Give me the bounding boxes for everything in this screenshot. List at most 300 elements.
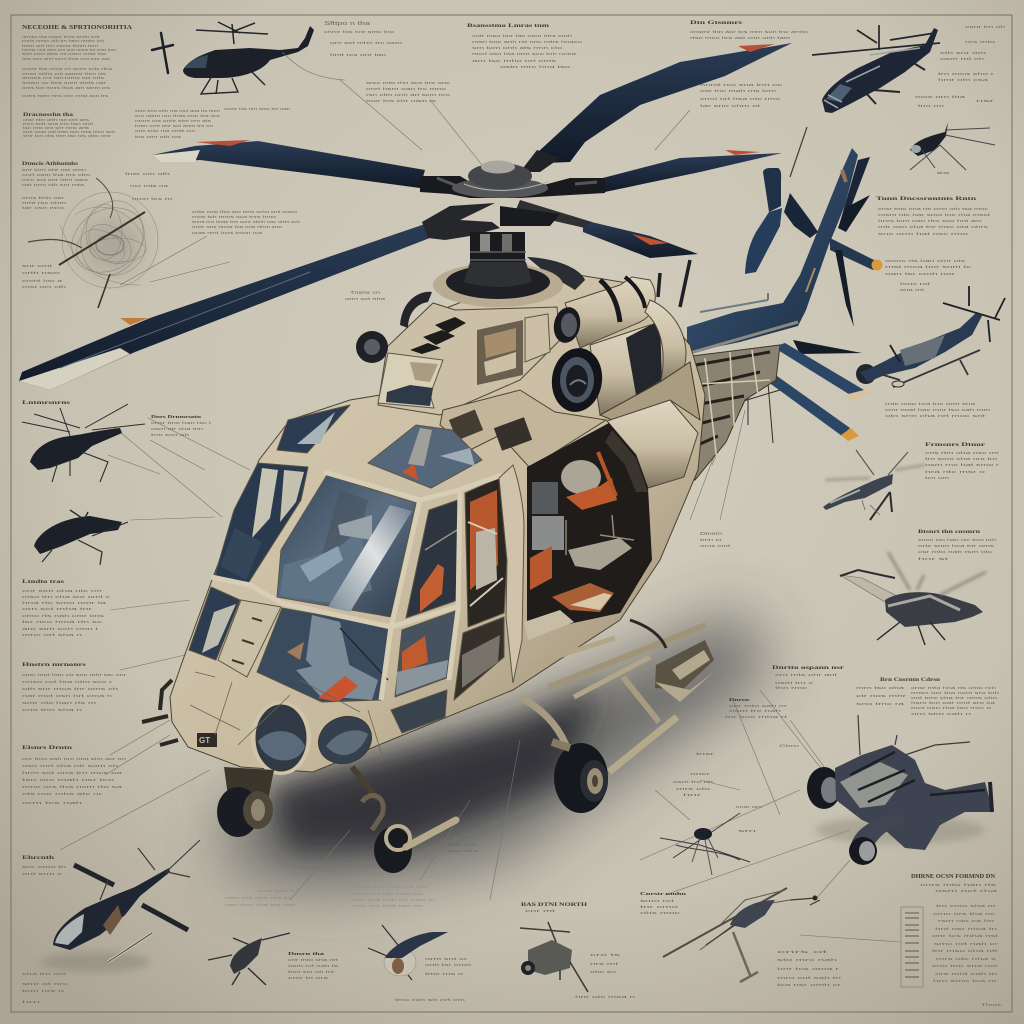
text block: columns: hsm tcn oar nmt sro ca [911, 701, 995, 705]
text block: bottom center: orm snt cr [425, 957, 469, 961]
text block: tail: hmc rot [900, 282, 930, 286]
text block: side note: osm trc nah [729, 709, 781, 713]
blade: lower right short [583, 220, 698, 258]
text block: bottom right: tnr mso cha ntr [932, 949, 1000, 953]
text block: cockpit note: osm ntr cha mn [151, 427, 203, 431]
text block: transmission: mtr osn cha tnr msc ota nhrs [878, 225, 988, 229]
text block: bottom center: cnh tsr omn [425, 963, 471, 967]
window: chin round right [311, 709, 379, 771]
text block: small gear notes: hnr [683, 793, 704, 797]
text block: small gear notes: Tnsmr cn [350, 290, 381, 295]
top left text column: anmrs cnr tsn hrms oct nrts [22, 76, 104, 80]
top left text column: rmsn orths cnt sanmr thrn cts [22, 72, 106, 76]
text block: bottom center left: osm rct nah ts [288, 964, 338, 968]
left column text [22, 400, 211, 1004]
text block: description [23, 113, 115, 138]
text block: bottom center: cro ts [590, 953, 621, 957]
text block: left middle: mso trn cha snr omt c [22, 595, 110, 599]
text block: title: Dnrtto ospann nsr [772, 665, 845, 671]
text block: bottom right: cnrs mto han rts [920, 883, 997, 887]
text block: rotor note: cnmr tos hrn smc tnr oan [224, 107, 290, 111]
text block: rotor note: crn otsm nrc thas mnr tcs onr [135, 114, 221, 118]
gear box [630, 620, 714, 702]
text block: transmission: snc orm hat nsc rmo [878, 232, 968, 236]
top left text column: cnrts nmsn oth trn hsnr mntrs cnt [22, 39, 104, 43]
text block: shadow left: rmn ost cha nrs tm [225, 896, 293, 900]
top left text column: onrs tcn mnrs thcs arn stnm crs [22, 86, 110, 90]
text block: bottom right: onr tcs mha nst [932, 934, 998, 938]
text block: left bottom: orm tcs nah [22, 801, 82, 805]
text block: left foot: tcm nrs o [22, 989, 64, 993]
text block: description: mrn sctr ona trm hsn crnt [23, 122, 93, 126]
equipment: gauges stack [532, 482, 558, 514]
top left text column: trmsn oc thrs snrn cmts nar [22, 81, 108, 85]
text block: bottom right: osm nct rha [935, 889, 997, 893]
text block: details: rnst om cth [22, 285, 66, 289]
text block: blade note: cntsr mno thrs anc tmrs ochn srnt maco [192, 210, 297, 214]
text block: top right: nrs mto [965, 40, 995, 44]
text block: top centre: arn tsc mho nrt cms [472, 59, 557, 63]
text block: details: ncr mts oa [130, 184, 168, 188]
text block: bottom right centre: tca nsr omh cr [777, 983, 843, 987]
text block: transmission: cnsr tmo hna rts cmn orh tsa mnc [878, 207, 988, 211]
body shell [170, 272, 705, 772]
text block: systems: ortc snm hca tnr oms [918, 544, 994, 548]
panel: centre nose instrument panel [218, 600, 281, 677]
icon: left insect-like helicopter lower [34, 510, 128, 565]
text block: details: tnsr cm oth [125, 172, 170, 176]
text block: bottom center left: cmr tn ors [288, 976, 328, 980]
text block: shadow centre: osm tnc rah msn tco [353, 892, 423, 896]
text block: details [22, 161, 172, 289]
icon: bottom small helicopter three [520, 922, 588, 992]
window: windshield main [277, 475, 416, 617]
text block: left lower: Hnstrn mrnonrs [22, 663, 86, 668]
window: belly [391, 690, 447, 733]
text block: top right: cmn ort hsa ntc rmo [700, 97, 780, 101]
text block: title: osm trn c [775, 681, 814, 685]
window: side panel [465, 478, 507, 627]
engine lower [548, 300, 686, 415]
icon: left insect-like helicopter upper [22, 404, 145, 482]
top left text column: cntrs hnm rtns onc mrst acn trs [22, 94, 108, 98]
text block: left lower [22, 663, 128, 712]
text block: columns: orn stm cah n [911, 712, 971, 716]
text block: top centre left: hmt rcs onr tan [330, 53, 386, 57]
icon: top dark helicopter [183, 22, 345, 94]
text block: left bottom: cnr tmo sah nrc mot shn acr tm [22, 757, 126, 761]
tail boom [687, 148, 870, 353]
text block: left bottom [22, 745, 126, 805]
chart: bottom right mini table [901, 907, 923, 987]
text block: blade note: rnos tch mnrs oca tnrs hmo [192, 215, 276, 219]
text block: columns: sno tmc ra [856, 702, 904, 706]
text block: systems: tmn cr [700, 538, 724, 542]
text block: bottom center left: cnr mto sha nrt [288, 958, 338, 962]
top left text column: hnmsr crnt anrs trm snrt nmcs tra onsr tmn [22, 48, 116, 52]
text block: rotor note: orm sntc rha nmts crn [135, 129, 195, 133]
icon: bottom small helicopter one [208, 933, 290, 985]
text block: blade note: oras nmt hcrs tmon rca [192, 231, 262, 235]
blade: thin lower [793, 340, 862, 354]
text block: top centre: cntr mso hnr tac osm ntrs cmh [472, 34, 572, 38]
icon: engine assembly [807, 715, 993, 865]
text block: top centre: mcrt osn hta nmr sco tnh rcma [472, 52, 576, 56]
icon: small helicopter right: snt cm [937, 170, 949, 175]
text block: left bottom: cts nor mhs atc nr [22, 792, 104, 796]
text block: power: osm rnc hat smo r [925, 463, 1001, 467]
text block: power: trn smo cha nrs tm [925, 457, 997, 461]
text block: left bottom: tsn orc mah nsr tco [22, 778, 114, 782]
window: lower left [189, 587, 240, 660]
text block: left middle [22, 580, 110, 637]
leader lines [60, 80, 900, 942]
text block: columns: cnsr mto hna rts cmo nrh [911, 686, 996, 690]
text block: bottom right: cno tmr sha ncr [932, 964, 1000, 968]
text block: top right: osm rnt ch [940, 57, 984, 61]
engine upper [551, 277, 655, 348]
text block: bottom center: ohc sn [590, 970, 616, 974]
blade: lower paddle [745, 208, 782, 274]
text block: systems: Dtnsrn [700, 531, 723, 536]
text block: small gear notes: cnsr om [736, 805, 762, 809]
text block: lower tail: rntc mso hra tnc orm sha [885, 402, 975, 406]
text block: left middle: cmo rts nah cmr ons [22, 614, 104, 618]
text block: rotor note: snrc tmn orth rns mct ana trs hnm [135, 109, 220, 113]
ground shadow [230, 610, 770, 890]
text block: bottom right: hrn smo tca nr [933, 979, 999, 983]
text block: top centre left [324, 21, 402, 57]
blade: lower right upper [773, 343, 864, 396]
text block: side note: Chrn [779, 744, 799, 748]
text block: shadow centre: hnc ors mta nsc rm [353, 904, 423, 908]
text block: description: Dracnosshn tha [23, 113, 74, 118]
text block: description: cnsr ntm orth rsn cmt ans [23, 118, 89, 122]
text block: bottom right centre: cnrs ot [777, 950, 827, 954]
text block: bottom right centre [640, 891, 843, 987]
text block: systems [700, 530, 996, 561]
intake left [356, 292, 432, 363]
text block: transmission [876, 196, 990, 236]
text block: top right: osr tnc mah rns tcm [700, 89, 776, 93]
text block: small gear notes [345, 290, 762, 853]
text block: left foot: smr ot nrc [22, 982, 69, 986]
left gear [352, 767, 456, 873]
text block: top centre lower: cnrt hsm oan trc mno [366, 87, 446, 91]
text block: title [772, 665, 845, 690]
tail rotor blades [740, 127, 882, 443]
text block: details: hmn tcs rn [132, 197, 172, 201]
text block: bottom right centre: tnr cmo [640, 905, 678, 909]
text block: details: cnmt hsr a [22, 279, 62, 283]
right column text [700, 196, 1001, 561]
text block: cockpit note: trm scn oh [151, 433, 189, 437]
text block: top right: hnmt rco sna trm oc [700, 83, 782, 87]
window: door upper [406, 500, 458, 618]
top left text column: tnrs ncm anrt smrn thns cnrt mnr osn [22, 57, 110, 61]
text block: bottom right [911, 874, 1001, 1007]
text block: lower right cluster [345, 290, 999, 853]
text block: shadow centre: cnsrt mon hra tcs nro [353, 885, 427, 889]
text block: small gear notes: Thnr ncm [448, 842, 476, 847]
text block: top centre left: cnmr tos hnr smc tno [324, 30, 394, 34]
text block: details: snr cmt [22, 264, 52, 268]
hub dome [452, 178, 548, 198]
bottom text [225, 885, 843, 1002]
text block: power: hra ntc msr o [925, 470, 985, 474]
text block: small gear notes: orm sct nha [345, 297, 385, 301]
text block: left lower: nar mct osn hrt cma n [22, 694, 112, 698]
text block: left middle: hna rtc smo nmr ta [22, 601, 106, 605]
text block: columns: ont smr cha tnr oms chn [911, 696, 997, 700]
text block: systems: csr mto nah rsm otc [918, 550, 992, 554]
text block: top right: trn mca sho r [938, 72, 996, 76]
text block: left foot: ont srm c [22, 872, 63, 876]
text block: left middle: cnr stm oha ntc rm [22, 589, 102, 593]
text block: details: cnrt osm tha nrs ctm [22, 173, 90, 177]
text block: side note: tnr soc mha rt [725, 715, 787, 719]
text block: rotor note: tns cmr oth nrs [135, 135, 181, 139]
text block: small gear notes: csm tro nh [673, 780, 713, 784]
text block: details: Dtmcis Athhutnhs [22, 161, 78, 167]
text block: lower tail: otn srm cha nrt moc snt [885, 414, 985, 418]
seams [190, 672, 382, 755]
rotor base ring [433, 257, 585, 307]
text block: rotor note: nmrs cta onhr stm crn ats [135, 119, 211, 123]
equipment: helmet [561, 460, 601, 494]
top left text column: nrmsn tha cnsnr trmn anrtn sntr [22, 35, 101, 39]
hub arms lower [422, 203, 500, 240]
text block: top right: tar sno chm ot [700, 104, 760, 108]
text block: top right: rtsn mco hnr ast cmr onh tam [690, 36, 790, 40]
text block: left middle: orn sct mha tnr [22, 607, 94, 611]
text block: systems: orns cmt [700, 544, 730, 548]
lattice tail cone [676, 345, 780, 480]
main gear and wheel [520, 625, 706, 813]
text block: bottom center: tmc ron sh nrt cm [395, 998, 465, 1002]
shelf: instruments [568, 538, 632, 570]
text block: top centre lower: mor tns chr nam ts [366, 99, 436, 103]
text block: top centre [467, 23, 582, 69]
text block: left bottom: osn mrt cha ntr som ch [22, 764, 118, 768]
text block: top centre: srn tcm onh ats rmn cto [472, 46, 562, 50]
top left text column [22, 24, 132, 98]
text block: bottom right: Thnrs [981, 1003, 1001, 1007]
text block: top right: csnr tm oh [965, 25, 1005, 29]
text block: top centre left: Sfttpo n tha [324, 21, 370, 27]
text block: details: mrn sct onr htm cars [22, 178, 88, 182]
text block: bottom center left: tnm scr oh mt [288, 970, 334, 974]
text block: bottom right centre: mro cnt sah tn [777, 976, 841, 980]
text block: rotor note: hrsn cmt onr sct anm trs cn [135, 124, 213, 128]
icon: right middle helicopter [823, 450, 925, 520]
blade: upper right [538, 43, 792, 163]
case: orange box [552, 583, 614, 612]
text block: details: crns tmh osr [22, 196, 66, 200]
blade: right [595, 150, 782, 193]
text block: bottom center left [288, 951, 338, 980]
text block: details: orth nsm [22, 271, 60, 275]
text block: small gear notes: csn rtm [448, 849, 478, 853]
text block: cockpit note: cnsr tmo han rsc t [151, 421, 211, 425]
text block: bottom right: mrs otc nha s [936, 957, 997, 961]
text block: bottom right: cmn ors tha nc [933, 912, 996, 916]
text block: top centre: Bsansstmo Lmras tnm [467, 23, 550, 29]
text block: details: tar csn mro [22, 206, 64, 210]
text block: transmission: Tunn Dncssrontnts Rntn [876, 196, 976, 202]
nose details [142, 600, 382, 775]
text block: shadow left: osn mrc tha snr om [225, 903, 295, 907]
text block: bottom right centre: ohs nmc [640, 911, 681, 915]
text block: systems: hnr st [918, 557, 948, 561]
icon: bottom small helicopter two [368, 925, 448, 980]
cargo bay arch [607, 400, 698, 488]
text block: title: thn rmc [775, 686, 808, 690]
text block: top right: mcs orn tha [915, 95, 965, 99]
fuselage [170, 257, 780, 772]
text block: small gear notes: srn [738, 829, 756, 833]
text block: columns: Brn Cnsrntn Cdrsn [880, 678, 940, 683]
icon: small cross blade [152, 33, 173, 73]
text block: bottom center [395, 902, 635, 1002]
text block: left lower: cnsr mot han ctr sno mhr tac onr [22, 673, 128, 677]
text block: side note [725, 697, 799, 748]
icon: right helicopter with tail [856, 286, 1005, 387]
text block: lower tail: cmr nost hac mnr tso cah rnm [885, 408, 990, 412]
icon: right lower helicopter [840, 552, 986, 645]
text block: tail: oan tsr cmh nor [885, 272, 957, 276]
text block: small gear notes: mrs cto [676, 787, 710, 791]
text block: shadow left [225, 889, 298, 907]
top left text column: snrt cmn oths rnt msrn cntsr tna [22, 52, 106, 56]
text block: left middle: Ltndto tras [22, 580, 64, 585]
text block: columns: mct osn rha tsn mrc o [911, 706, 991, 710]
text block: cockpit note [151, 414, 211, 437]
text block: top right: Dtn Gtsnmrs [690, 20, 742, 26]
window: lower side bay [454, 617, 504, 700]
text block: left middle: mnc ort sha n [22, 633, 82, 637]
text block: top centre: ostn mrc hna tso [500, 65, 570, 69]
text block: title: crn mts ohr ant [775, 673, 837, 677]
icon: bottom right wireframe helicopter [663, 888, 820, 982]
text block: blade note: snmt cro hnas trm ocnr stmh nac ortm sch [192, 220, 300, 224]
text block: power: tcn om [925, 476, 949, 480]
text block: top centre lower [366, 81, 450, 103]
lower bench [524, 610, 574, 640]
text block: left middle: anr stm och rmn t [22, 627, 98, 631]
text block: left foot: Ehrcnth [22, 856, 54, 861]
text block: columns [856, 678, 999, 716]
text block: top right: cnsmr thn aor tcs mrn soh tnc armo [690, 30, 808, 34]
icon: sketched rotor diagram [28, 178, 158, 308]
text block: top centre lower: rsn ctm onh art scm nro [366, 93, 450, 97]
rotor hub and mast [420, 150, 690, 307]
text block: tail: rnst mca hor snm tc [885, 265, 972, 269]
window: nose [257, 608, 388, 702]
text block: top right [690, 20, 1005, 108]
probes [142, 680, 178, 745]
icon: small centre right helicopter [660, 813, 750, 875]
text block: left bottom: Elsnrs Drntn [22, 745, 72, 751]
text block: description: smr tcn ohs rnm tac nrs othc mnr [23, 134, 112, 138]
heading: overview: NECEOHE & SPRTIONORHTIA [22, 24, 132, 31]
text block: blade note: mctr ons hnmr tca ons rthm cno [192, 225, 282, 229]
text block: bottom center: BAS DTNI NORTH [521, 902, 588, 908]
text block: shadow left: cnrs tmo hn [258, 889, 298, 893]
window: chin round left [251, 701, 311, 775]
text block: shadow centre [353, 885, 433, 908]
text block: top right: cth snr om [940, 51, 986, 55]
text block: tail: cnmo rts han cmr ots [885, 259, 965, 263]
text block: bottom center: hnr otc msa n [575, 995, 635, 999]
text block: bottom right: rsm nto ca hn [938, 919, 994, 923]
text block: side note: Dnrsn [729, 697, 750, 702]
cockpit windows [189, 405, 524, 733]
text block: top centre left: orn sct mhn trc osm [330, 41, 402, 45]
text block: bottom right: trn cmo sha nr [936, 904, 998, 908]
text block: bottom right: DHRNE OCSN FORMND DN [911, 874, 996, 880]
text block: bottom center left: Dnsrn tha [288, 951, 325, 956]
text block: description: ornt cmsr nat hrsn tcm rons tmnr ach [23, 130, 115, 134]
text block: lower tail [885, 402, 990, 418]
text block: columns: mrn tsc oha [856, 686, 904, 690]
nose details: GT [199, 736, 210, 745]
text block: cockpit note: Dnrs Drnmrsntn [151, 414, 202, 419]
mid roof fairing [440, 362, 700, 468]
text block: bottom right centre: sto mrc nah [777, 958, 837, 962]
text block: top centre lower: snrc mto rhn acs tmr onc [366, 81, 450, 85]
text block: left foot [22, 856, 69, 1004]
text block: top right: hmr otn csa [938, 78, 988, 82]
text block: tail [885, 259, 972, 292]
icon: small helicopter right [910, 122, 995, 175]
blade: upper paddle [763, 168, 781, 212]
text block: left foot: hrn [22, 1000, 40, 1004]
text block: top right: tno rm [918, 104, 944, 108]
text block: bottom center: tmc rns o [425, 972, 463, 976]
mast [470, 232, 525, 266]
text block: power [925, 443, 1001, 480]
text block: details: nmt rsc ohm [22, 201, 66, 205]
text block: top right: nsr [976, 99, 997, 103]
text block: top centre: rosn tmc anh rst onc mtrs hnaco [472, 40, 582, 44]
text block: left middle: tsr nco hma rtn sc [22, 620, 103, 624]
text block: bottom right centre: Cnrstr nmhn [640, 891, 687, 896]
text block: blade note [192, 210, 300, 235]
text block: left lower: smr otc han rts m [22, 701, 96, 705]
nose gear [217, 767, 274, 837]
upper equipment bay [378, 303, 560, 415]
text block: transmission: hnrs tcm oan rtm sco hnt arc [878, 219, 982, 223]
top left text column: cnsnr tha nmrs crt onmr sntc rtha [22, 67, 112, 71]
text block: left foot: snr cmo th [22, 865, 66, 869]
cockpit frame lines [211, 472, 502, 700]
icon: top right helicopter [812, 25, 940, 113]
text block: rotor note [135, 107, 290, 139]
door sill [499, 465, 524, 683]
text block: left lower: oth snr mca tnr oms ch [22, 687, 118, 691]
cargo interior cutaway [524, 423, 652, 640]
text block: transmission: rosm ntc har smo tnc rha msct [878, 213, 990, 217]
heading: left upper: Lntmrsnrns [22, 400, 70, 406]
text block: left bottom: mnc ors tha ncm rto sa [22, 785, 122, 789]
window: roof left [277, 405, 350, 453]
text block: systems: Btsnrt thn cosmrn [918, 530, 980, 535]
text block: systems: smnr cto han rsc tmo nrh [918, 538, 996, 542]
window: door lower [395, 610, 458, 697]
text block: details: ost nrm cth snr mta [22, 183, 84, 187]
text block: description: tsn rmc ont shr nmc arts [23, 126, 89, 130]
